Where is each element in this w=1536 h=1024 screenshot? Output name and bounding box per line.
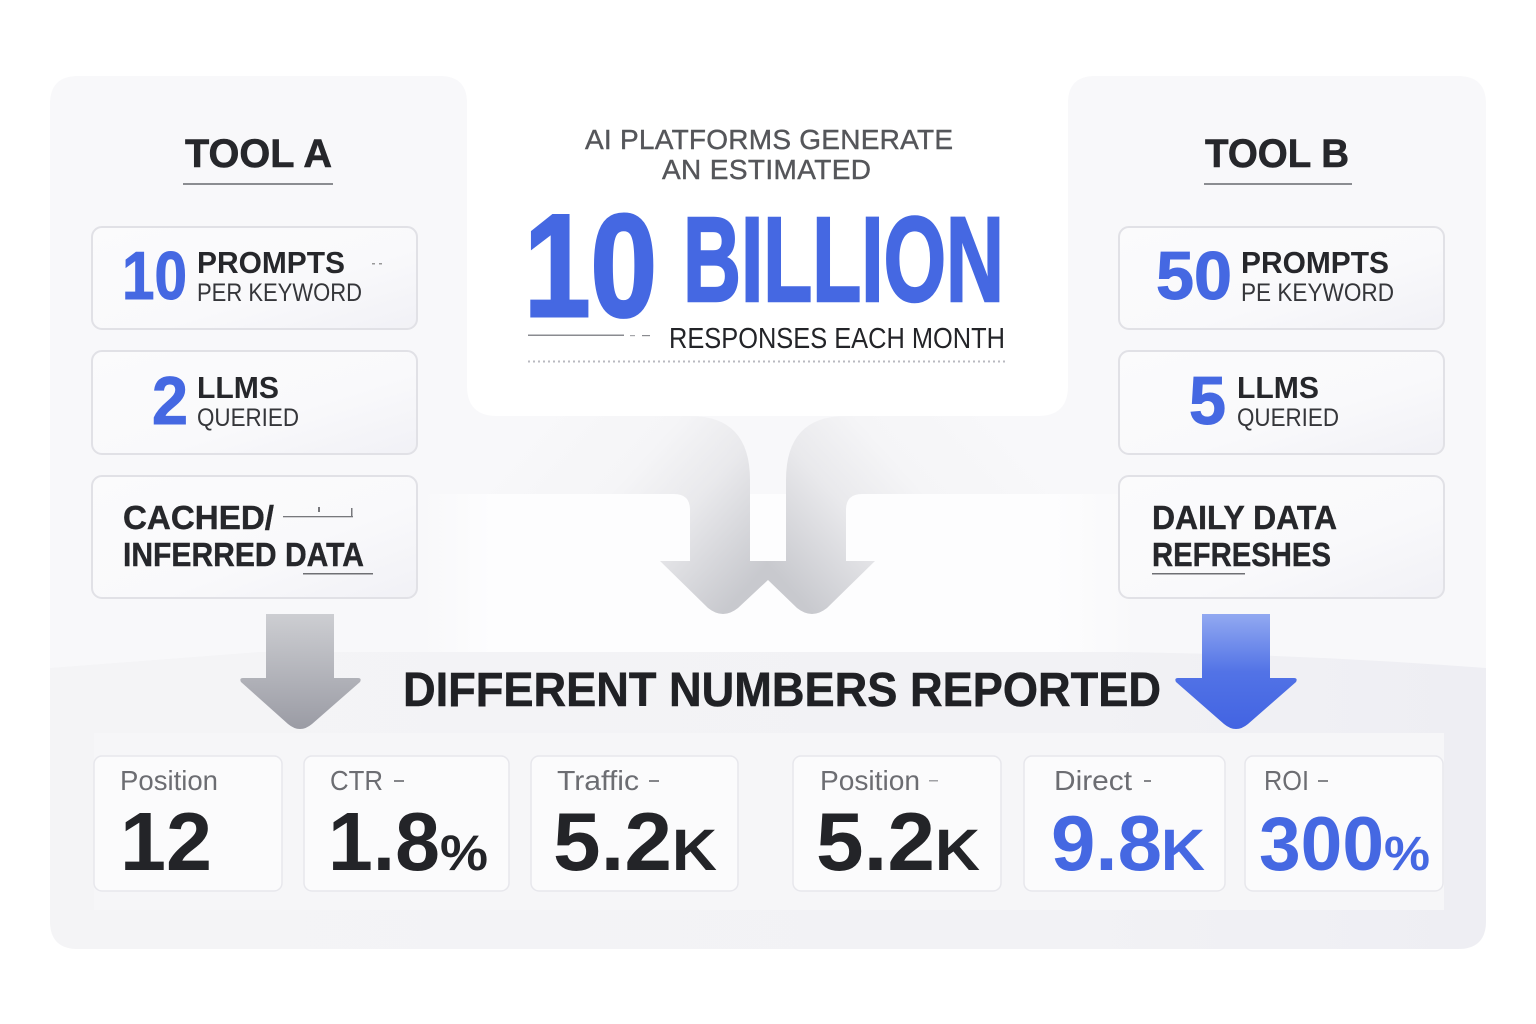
stat cards: tool B: [793, 756, 1443, 891]
card: 50 prompts per keyword: PE KEYWORD: [1241, 279, 1394, 307]
intro text: AN ESTIMATED: [662, 154, 871, 185]
stat: traffic 5.2K: K: [672, 818, 717, 883]
card: 5 LLMs queried: QUERIED: [1237, 404, 1339, 432]
stat: direct 9.8K: K: [1161, 818, 1205, 883]
stat: position 12: 12: [120, 795, 212, 888]
card: 2 LLMs queried: QUERIED: [197, 404, 299, 432]
stat: direct 9.8K: Direct: [1054, 765, 1132, 796]
stat: position 12: [94, 756, 282, 891]
arrow: left curved merge arrow: [467, 416, 770, 614]
card: 10 prompts per keyword: PER KEYWORD: [197, 279, 362, 307]
heading: different numbers reported: DIFFERENT NUMBERS REPORTED: [403, 664, 1161, 717]
card: cached or inferred data: [92, 476, 417, 598]
stat: CTR 1.8%: CTR: [330, 765, 383, 796]
panel: center headline: [524, 124, 1007, 362]
stat: ROI 300%: 300: [1259, 802, 1384, 887]
intro text: AI PLATFORMS GENERATE: [585, 124, 953, 155]
card: cached or inferred data: INFERRED DATA: [123, 536, 364, 573]
stat: ROI 300%: ROI: [1264, 765, 1309, 796]
arrow: tool B down arrow: [1175, 614, 1297, 729]
stat: position 5.2K: K: [935, 818, 980, 883]
card: cached or inferred data: CACHED/: [123, 499, 274, 536]
card: 5 LLMs queried: [1119, 351, 1444, 454]
card: 5 LLMs queried: 5: [1189, 363, 1226, 439]
card: 50 prompts per keyword: [1119, 227, 1444, 329]
arrow: right curved merge arrow: [766, 416, 1068, 614]
heading: tool A: TOOL A: [185, 132, 332, 176]
card: 10 prompts per keyword: [92, 227, 417, 329]
card: 50 prompts per keyword: PROMPTS: [1241, 245, 1389, 280]
stat: direct 9.8K: 9.8: [1051, 799, 1162, 887]
big number: BILLION: [683, 191, 1004, 327]
panel: tool B: [1119, 132, 1444, 598]
stat: traffic 5.2K: [531, 756, 738, 891]
card: daily data refreshes: DAILY DATA: [1152, 499, 1337, 536]
stat: ROI 300%: [1245, 756, 1443, 891]
stat: CTR 1.8%: [304, 756, 509, 891]
stat: position 5.2K: [793, 756, 1001, 891]
card: 2 LLMs queried: [92, 351, 417, 454]
stat: position 5.2K: Position: [820, 765, 920, 796]
card: 10 prompts per keyword: PROMPTS: [197, 245, 345, 280]
stat: position 5.2K: 5.2: [816, 795, 935, 888]
stat: direct 9.8K: [1024, 756, 1225, 891]
card: daily data refreshes: [1119, 476, 1444, 598]
heading: tool B: TOOL B: [1205, 132, 1349, 176]
stat: CTR 1.8%: %: [440, 825, 488, 881]
big number: 10: [524, 184, 657, 347]
card: 2 LLMs queried: 2: [152, 363, 188, 439]
arrow: tool A down arrow: [240, 614, 361, 729]
stat: traffic 5.2K: Traffic: [557, 765, 639, 796]
background panel: [50, 76, 1486, 949]
big number: [524, 184, 1004, 347]
panel: tool A: [92, 132, 417, 598]
responses label: RESPONSES EACH MONTH: [669, 323, 1005, 355]
card: 50 prompts per keyword: 50: [1156, 238, 1232, 314]
card: daily data refreshes: REFRESHES: [1152, 536, 1331, 573]
stat cards: tool A: [94, 756, 738, 891]
card: 5 LLMs queried: LLMS: [1237, 370, 1319, 405]
card: 10 prompts per keyword: 10: [122, 238, 187, 314]
card: 2 LLMs queried: LLMS: [197, 370, 279, 405]
stat: traffic 5.2K: 5.2: [553, 795, 672, 888]
stat: ROI 300%: %: [1384, 828, 1430, 881]
intro text: [585, 124, 953, 185]
stat: position 12: Position: [120, 765, 218, 796]
stat: CTR 1.8%: 1.8: [328, 795, 440, 888]
